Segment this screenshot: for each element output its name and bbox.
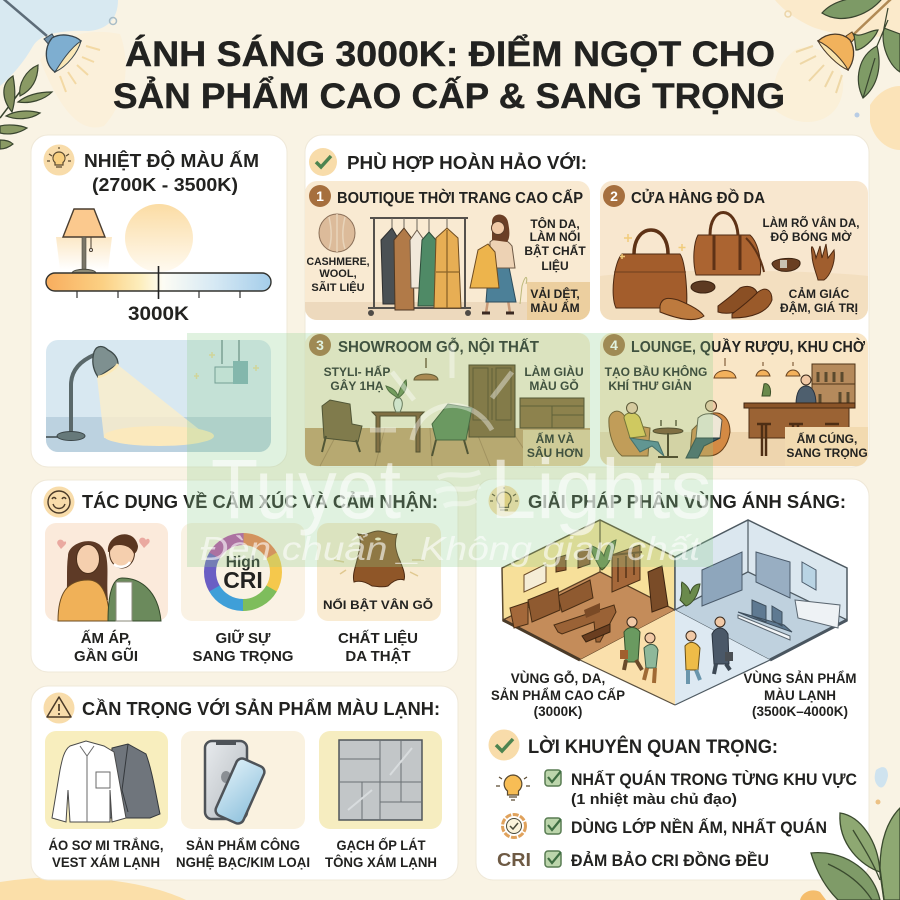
card 3: wood showroom: 3 xyxy=(316,337,324,353)
advice text xyxy=(571,770,857,870)
card 4 labels: ẤM CÚNG, xyxy=(797,431,857,446)
card 1 labels: SÃIT LIỆU xyxy=(311,281,365,294)
card 4: lounge and bar: LOUNGE, QUẦY RƯỢU, KHU CHỜ xyxy=(631,338,866,356)
icon: check xyxy=(309,148,337,176)
watermark wordmark: Lights xyxy=(490,442,712,536)
card: high CRI ring xyxy=(181,523,305,621)
watermark logo xyxy=(370,345,512,506)
labels: SANG TRỌNG xyxy=(192,648,294,665)
card: leather hide xyxy=(317,523,441,621)
card 4: lounge and bar: 4 xyxy=(610,337,618,353)
labels: CHẤT LIỆU xyxy=(338,629,418,647)
card 3 labels: MÀU GỖ xyxy=(529,378,579,393)
icon: table lamp xyxy=(56,209,112,273)
card 2 labels: ĐỘ BÓNG MỜ xyxy=(771,229,852,244)
advice text: NHẤT QUÁN TRONG TỪNG KHU VỰC xyxy=(571,770,857,789)
title: SẢN PHẨM CAO CẤP & SANG TRỌNG xyxy=(113,76,785,116)
panel: warm color temperature xyxy=(31,135,287,467)
card 2 labels: CẢM GIÁC xyxy=(789,286,850,301)
icon: smile xyxy=(44,486,74,518)
swatch xyxy=(319,214,355,252)
heading: (2700K - 3500K) xyxy=(92,175,238,195)
advice text: DÙNG LỚP NỀN ẤM, NHẤT QUÁN xyxy=(571,818,827,837)
heading xyxy=(84,150,259,195)
card 4: lounge and bar xyxy=(600,333,868,466)
zone labels: SẢN PHẨM CAO CẤP xyxy=(491,688,625,703)
labels: VEST XÁM LẠNH xyxy=(52,855,160,870)
bar with shelf xyxy=(744,364,855,456)
labels xyxy=(48,838,437,870)
heading: TÁC DỤNG VỀ CẢM XÚC VÀ CẢM NHẬN: xyxy=(82,491,438,512)
zone labels: (3000K) xyxy=(534,704,582,719)
icon: bulb xyxy=(488,486,520,516)
labels: TÔNG XÁM LẠNH xyxy=(325,855,437,870)
zone labels: (3500K–4000K) xyxy=(752,704,848,719)
labels: GẦN GŨI xyxy=(74,647,138,665)
icon: CRI: CRI xyxy=(497,850,531,870)
advice list xyxy=(496,770,857,870)
decoration: leaves top right xyxy=(822,0,900,98)
labels: ẤM ÁP, xyxy=(81,630,131,647)
card: high CRI ring: High xyxy=(226,554,260,571)
heading: CẦN TRỌNG VỚI SẢN PHẨM MÀU LẠNH: xyxy=(82,698,440,719)
icon: advice check xyxy=(488,730,520,760)
heading: GIẢI PHÁP PHÂN VÙNG ÁNH SÁNG: xyxy=(528,491,846,512)
card 3 labels: STYLI- HẤP xyxy=(324,364,390,379)
panel: caution with cool products xyxy=(31,686,458,880)
card 2: leather store: 2 xyxy=(610,188,618,204)
scene: desk lamp xyxy=(46,340,271,452)
watermark wordmark xyxy=(200,442,712,567)
card 1: fashion boutique xyxy=(305,181,590,320)
pendant lamp xyxy=(414,358,438,380)
watermark wordmark: Tuyet xyxy=(211,442,401,536)
card 2 labels: LÀM RÕ VÂN DA, xyxy=(762,215,860,230)
cool room xyxy=(675,520,847,705)
card 2 labels: ĐẬM, GIÁ TRỊ xyxy=(780,300,858,315)
labels: ÁO SƠ MI TRẮNG, xyxy=(48,838,164,853)
heading: PHÙ HỢP HOÀN HẢO VỚI: xyxy=(347,152,587,173)
card 1 labels: LIỆU xyxy=(541,258,569,273)
isometric zoning diagram xyxy=(502,520,847,705)
card: shirt and vest xyxy=(45,731,168,829)
card 2: leather store xyxy=(600,181,868,320)
icon: light bulb xyxy=(44,144,74,176)
color temperature bar xyxy=(46,266,271,325)
card 1 labels: LÀM NỔI xyxy=(530,229,580,244)
zone labels: VÙNG SẢN PHẨM xyxy=(744,671,856,686)
card 1 labels: VẢI DỆT, xyxy=(530,286,580,301)
wardrobe and dresser xyxy=(469,365,584,437)
panel: zoning solution and advice xyxy=(476,479,869,880)
title: ÁNH SÁNG 3000K: ĐIỂM NGỌT CHO xyxy=(125,34,775,74)
decoration: leaves left xyxy=(0,65,52,149)
card 4 labels: SANG TRỌNG xyxy=(786,446,868,460)
tick box 1 xyxy=(545,770,561,786)
advice text: (1 nhiệt màu chủ đạo) xyxy=(571,791,737,808)
card 3 labels: SÂU HƠN xyxy=(527,445,583,460)
card 1: fashion boutique: 1 xyxy=(316,188,324,204)
card 1 labels: TÔN DA, xyxy=(530,216,580,231)
card 1 labels: WOOL, xyxy=(319,268,357,280)
dining set xyxy=(322,380,472,456)
color temperature bar: 3000K xyxy=(128,304,189,325)
decoration: hanging lamp top left xyxy=(0,0,100,92)
card 3 labels: LÀM GIÀU xyxy=(524,364,584,379)
card 1 labels xyxy=(306,216,586,315)
card 4 labels xyxy=(605,364,868,460)
card 1 labels: MÀU ẤM xyxy=(530,300,580,315)
shoes and belt xyxy=(620,234,834,319)
handbag large xyxy=(613,212,764,308)
labels: GẠCH ỐP LÁT xyxy=(336,838,426,853)
card 1: fashion boutique: BOUTIQUE THỜI TRANG CAO CẤP xyxy=(337,189,583,207)
watermark wordmark: Đèn chuẩn _Không gian chất xyxy=(200,530,702,567)
icon: warning xyxy=(44,692,74,724)
clothing rack xyxy=(368,218,471,316)
card 2: leather store: CỬA HÀNG ĐỒ DA xyxy=(631,189,765,207)
card 3 labels: GÂY 1HẠ xyxy=(330,378,384,393)
advice heading: LỜI KHUYÊN QUAN TRỌNG: xyxy=(528,736,778,758)
labels: NGHỆ BẠC/KIM LOẠI xyxy=(176,855,310,870)
decoration: leaves bottom right xyxy=(811,808,900,900)
warm room xyxy=(502,520,675,705)
icon: badge xyxy=(502,814,526,838)
icon: sun glow xyxy=(125,204,193,272)
tick box 3 xyxy=(545,851,561,867)
card: leather hide: NỔI BẬT VÂN GỖ xyxy=(323,597,433,612)
panel: perfect fit for xyxy=(305,135,869,467)
zone labels xyxy=(491,671,856,719)
shoppers xyxy=(620,617,733,684)
card: high CRI ring: CRI xyxy=(223,567,263,593)
card: tile xyxy=(319,731,442,829)
watermark overlay xyxy=(187,333,713,567)
tick box 2 xyxy=(545,818,561,834)
heading: NHIỆT ĐỘ MÀU ẤM xyxy=(84,150,259,171)
card: phones xyxy=(181,731,305,829)
card 4 labels: KHÍ THƯ GIẢN xyxy=(608,378,692,393)
decoration: hanging lamp top right xyxy=(796,0,892,93)
card 3 labels xyxy=(324,364,584,460)
pendants xyxy=(714,358,800,378)
card 3: wood showroom: SHOWROOM GỖ, NỘI THẤT xyxy=(338,338,540,356)
zone labels: MÀU LẠNH xyxy=(764,688,836,703)
advice text: ĐẢM BẢO CRI ĐỒNG ĐỀU xyxy=(571,851,769,870)
card 4 labels: TẠO BẦU KHÔNG xyxy=(605,364,707,379)
labels xyxy=(74,629,418,665)
card 3 labels: ẤM VÀ xyxy=(536,431,575,446)
woman with garment xyxy=(470,214,516,313)
card 1 labels: BẬT CHẤT xyxy=(524,243,586,258)
labels: DA THẬT xyxy=(345,647,411,665)
title xyxy=(113,34,785,116)
panel: emotional effects xyxy=(31,480,458,672)
labels: SẢN PHẨM CÔNG xyxy=(186,838,300,853)
card: warm couple xyxy=(45,523,168,621)
zone labels: VÙNG GỖ, DA, xyxy=(511,671,605,686)
labels: GIỮ SỰ xyxy=(216,629,271,647)
card 3: wood showroom xyxy=(305,333,590,466)
icon: bulb advice xyxy=(496,775,530,800)
card 2 labels xyxy=(762,215,860,315)
seated couple xyxy=(609,400,730,458)
card 1 labels: CASHMERE, xyxy=(306,256,370,268)
warm label patch xyxy=(785,427,868,466)
